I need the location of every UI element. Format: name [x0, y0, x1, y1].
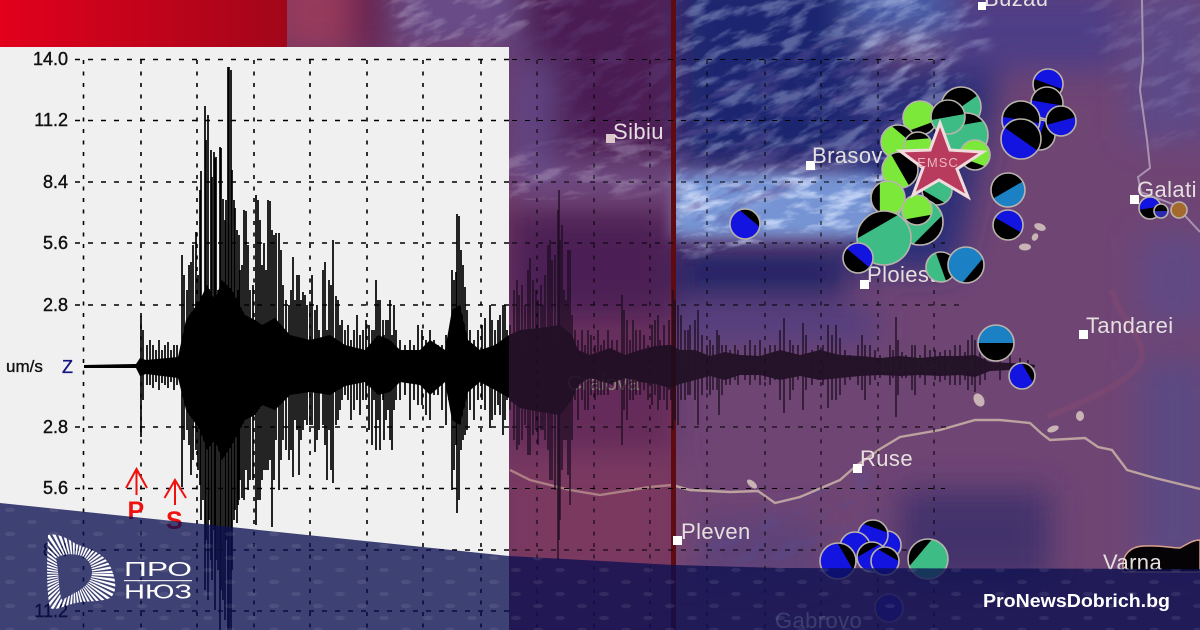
logo wordmark: НЮЗ — [124, 582, 192, 604]
site name: ProNewsDobrich.bg — [983, 591, 1170, 611]
axis labels: 8.4 — [43, 540, 68, 560]
background relief map — [287, 0, 1200, 573]
axis labels: um/s — [6, 357, 43, 376]
S wave arrow and label — [164, 480, 186, 535]
axis labels: 2.8 — [43, 295, 68, 315]
axis labels — [6, 49, 73, 621]
top red bar — [0, 0, 287, 47]
map city labels: Tandarei — [1086, 313, 1174, 338]
map city labels: Sibiu — [613, 119, 664, 144]
river: Siret — [1138, 0, 1200, 232]
focal mechanism cluster: Galati — [1139, 197, 1187, 221]
axis labels: 5.6 — [43, 478, 68, 498]
seismogram waveform: over map — [509, 190, 1035, 560]
axis labels: Z — [62, 357, 73, 377]
map city labels: Varna — [1103, 550, 1162, 575]
epicentre star with EMSC label: EMSC — [917, 155, 959, 170]
focal mechanism cluster: blue and cyan — [730, 69, 1076, 389]
seismogram waveform: west part — [84, 67, 509, 630]
S wave arrow and label: S — [166, 507, 183, 535]
reddish tint over west half of map — [287, 0, 672, 630]
logo: D emblem — [38, 538, 110, 610]
vertical map divider — [671, 0, 676, 630]
axis labels: 11.2 — [34, 601, 68, 621]
logo wordmark — [124, 559, 192, 604]
seismogram grid — [75, 60, 965, 630]
map city labels: Bucharest — [880, 354, 975, 377]
bright mountain band — [672, 172, 877, 238]
focal mechanism cluster: south — [820, 516, 948, 622]
map city labels: Galati — [1137, 177, 1197, 202]
map city labels — [567, 0, 1197, 630]
bottom navy band — [0, 500, 1200, 630]
map city labels: Pleven — [681, 519, 751, 544]
logo wordmark: ПРО — [124, 559, 192, 581]
P wave arrow and label — [126, 469, 147, 525]
focal mechanism cluster: green — [850, 79, 990, 282]
axis labels: 14.0 — [33, 49, 68, 69]
axis labels: 11.2 — [34, 110, 68, 130]
axis labels: 8.4 — [43, 172, 68, 192]
map city labels: Craiova — [567, 372, 640, 395]
map city labels: Ruse — [860, 446, 913, 471]
map city labels: Brasov — [812, 143, 883, 168]
axis labels: 5.6 — [43, 233, 68, 253]
coast arc — [1047, 290, 1142, 417]
black sea — [1123, 540, 1200, 572]
map city labels: Ploiesti — [867, 262, 941, 287]
epicentre star with EMSC label — [900, 123, 983, 197]
P wave arrow and label: P — [128, 497, 144, 525]
axis labels: 2.8 — [43, 417, 68, 437]
river: Danube — [510, 420, 1200, 503]
lakes — [745, 222, 1084, 490]
seismogram panel — [0, 47, 509, 630]
